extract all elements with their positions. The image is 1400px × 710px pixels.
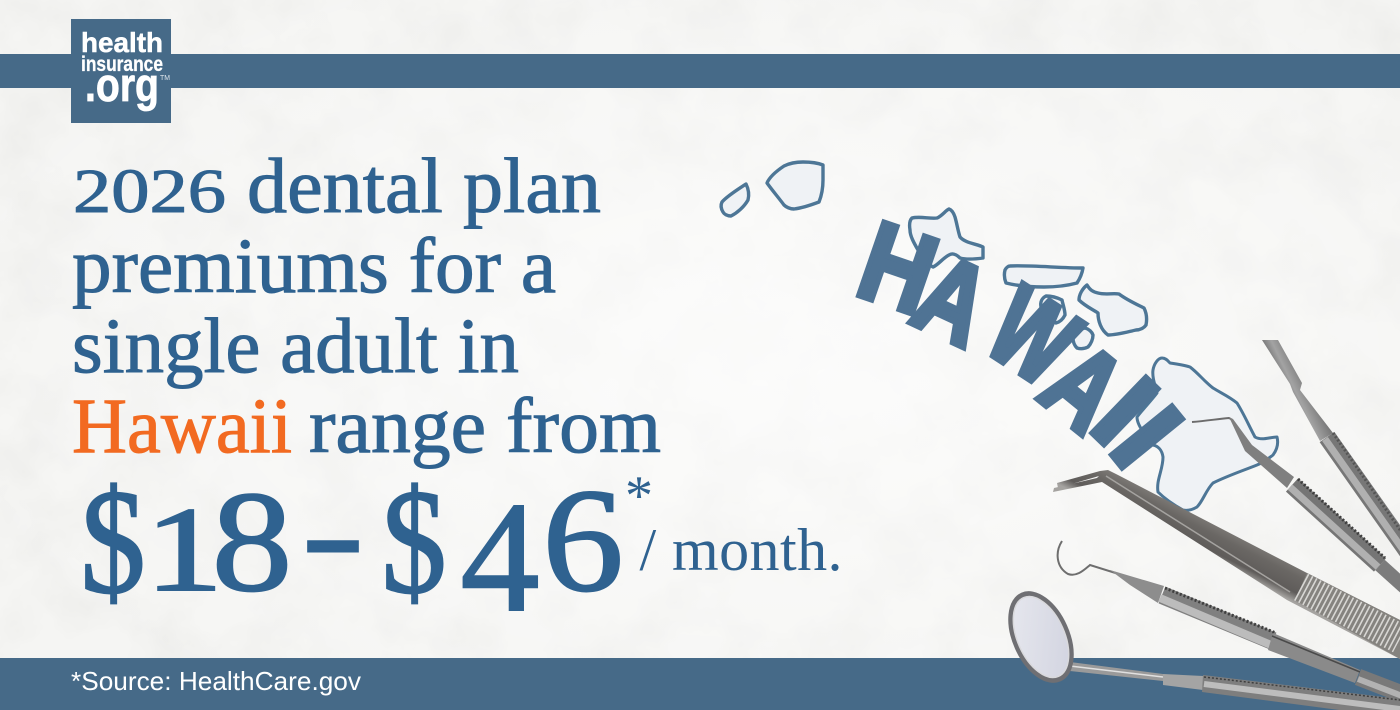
- logo: healthinsurance.org: .org: [85, 58, 159, 111]
- dental tweezers: [1053, 470, 1400, 659]
- logo: healthinsurance.org: TM: [160, 75, 170, 82]
- curved word HAWAII: I: [1070, 355, 1180, 467]
- curved word HAWAII: A: [1020, 319, 1147, 456]
- price range: 8: [212, 463, 292, 622]
- title text: 2026: [73, 158, 226, 226]
- curved word HAWAII: H: [845, 198, 951, 339]
- dental mirror tool: [999, 584, 1400, 710]
- title text: range from: [309, 382, 661, 469]
- price range: [80, 458, 842, 645]
- curved word HAWAII: [845, 198, 1205, 488]
- logo: healthinsurance.org: [71, 19, 171, 123]
- top band: [0, 54, 1400, 88]
- curved word HAWAII: I: [1089, 386, 1205, 488]
- source note: *Source: HealthCare.gov: [71, 666, 361, 696]
- price range: 1: [145, 483, 223, 617]
- curved word HAWAII: A: [897, 230, 1009, 371]
- dental hook explorer tool: [1058, 541, 1400, 699]
- curved word HAWAII: W: [967, 263, 1099, 409]
- bottom band: [0, 658, 1400, 710]
- title text: Hawaii: [72, 382, 292, 469]
- title text: dental plan: [247, 142, 601, 229]
- logo: healthinsurance.org: insurance: [81, 53, 163, 76]
- map of Hawaiian islands: [721, 162, 1278, 510]
- price range: $: [381, 460, 447, 625]
- title text: single adult in: [72, 302, 519, 389]
- price range: $: [80, 460, 146, 625]
- price range: 6: [542, 458, 624, 622]
- price range: *: [625, 465, 653, 527]
- title text: [72, 142, 661, 469]
- price range: / month.: [640, 517, 842, 583]
- price range: –: [311, 491, 356, 585]
- dental probe tool: [1192, 417, 1400, 592]
- logo: healthinsurance.org: health: [81, 27, 163, 58]
- dental spatula tool: [1262, 340, 1400, 554]
- price range: 4: [460, 470, 540, 645]
- title text: premiums for a: [72, 222, 556, 309]
